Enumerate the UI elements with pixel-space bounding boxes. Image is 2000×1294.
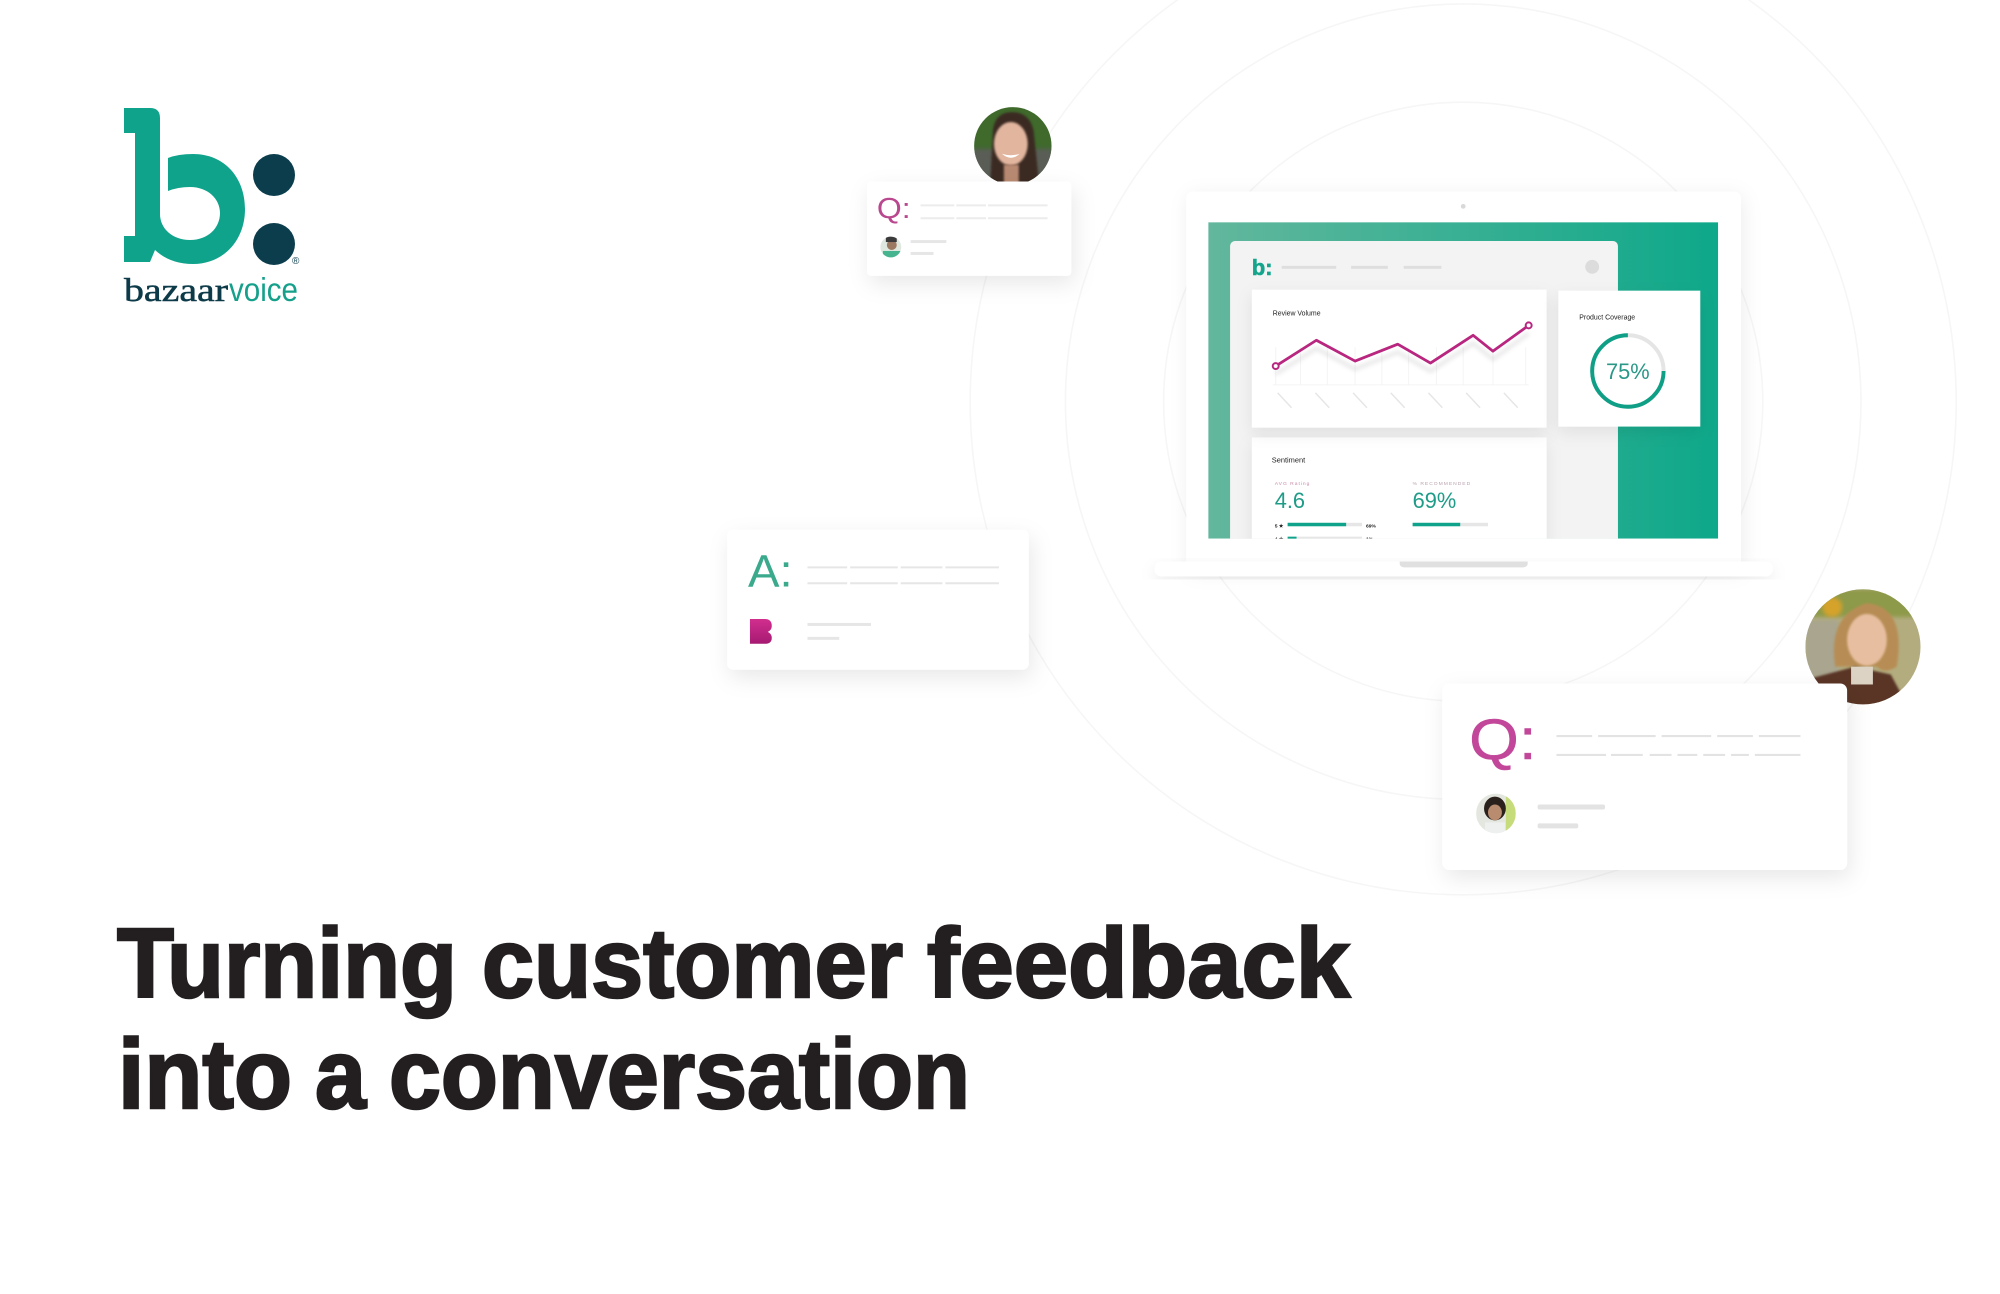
Q label: Q: (877, 193, 911, 225)
mini logo: b: (1252, 255, 1272, 280)
question card: large (1442, 683, 1847, 870)
logo: bazaarvoice (124, 108, 300, 309)
infographic canvas (116, 0, 1957, 1110)
coverage value: 75% (1606, 359, 1650, 384)
brand icon B (750, 619, 772, 644)
wordmark: voice (229, 271, 298, 308)
title line 2: conversation (389, 1019, 970, 1129)
A label: A: (748, 545, 793, 596)
title line 1: customer (482, 908, 903, 1018)
wordmark: bazaar (124, 273, 228, 309)
dashboard header (1253, 258, 1599, 276)
line chart (1273, 322, 1532, 369)
line chart shadow (1276, 333, 1529, 374)
screen background (1208, 222, 1718, 539)
panel: sentiment (1250, 438, 1548, 539)
logo dots (253, 154, 295, 265)
coverage ring (1592, 335, 1664, 407)
review volume title: Review Volume (1273, 310, 1321, 317)
title line 1: feedback (927, 908, 1350, 1018)
background concentric circles (970, 0, 1956, 895)
Q label: Q: (1469, 708, 1537, 772)
rating bars: 69% (1366, 524, 1376, 530)
recommended bar (1413, 523, 1488, 526)
title line 2: a (315, 1019, 367, 1129)
recommended label: % RECOMMENDED (1413, 481, 1471, 487)
sentiment title: Sentiment (1272, 455, 1306, 464)
brand lines (807, 623, 871, 640)
logo mark b (124, 108, 245, 264)
avatar: woman bottom right (1805, 589, 1921, 709)
customer avatar (1476, 794, 1516, 834)
avatar: woman top (974, 107, 1052, 182)
coverage title: Product Coverage (1579, 314, 1635, 321)
author lines (1538, 805, 1605, 828)
axis baseline (1273, 347, 1529, 385)
user dot (1585, 260, 1599, 274)
rating bars (1274, 522, 1376, 539)
average rating value: 4.6 (1275, 488, 1305, 513)
question lines (921, 205, 1049, 218)
camera (1461, 204, 1466, 209)
axis tick labels (1278, 393, 1518, 408)
rating bars: 5 ★ (1275, 524, 1284, 530)
registered mark: ® (292, 256, 300, 267)
rating bars: 1% (1366, 537, 1374, 543)
author lines (911, 240, 946, 255)
title line 2: into (118, 1019, 292, 1129)
recommended value: 69% (1413, 488, 1456, 513)
title line 1: Turning (117, 908, 457, 1018)
laptop lid (1186, 191, 1741, 568)
average rating label: AVG Rating (1275, 481, 1310, 487)
question lines (1556, 735, 1801, 737)
panel: product coverage (1558, 291, 1700, 427)
laptop screen (1208, 222, 1718, 566)
answer lines (807, 567, 999, 583)
nav bars (1282, 266, 1441, 269)
laptop illustration (1155, 191, 1773, 576)
question card: small (867, 182, 1071, 276)
panel: review volume (1252, 290, 1547, 428)
rating bars: 4 ★ (1275, 537, 1284, 543)
laptop notch (1400, 561, 1528, 567)
title (117, 908, 1350, 1129)
small avatar (880, 236, 902, 258)
answer card (727, 530, 1029, 670)
laptop base (1155, 561, 1773, 576)
dashboard window (1230, 241, 1618, 558)
illustration group (727, 0, 1956, 895)
